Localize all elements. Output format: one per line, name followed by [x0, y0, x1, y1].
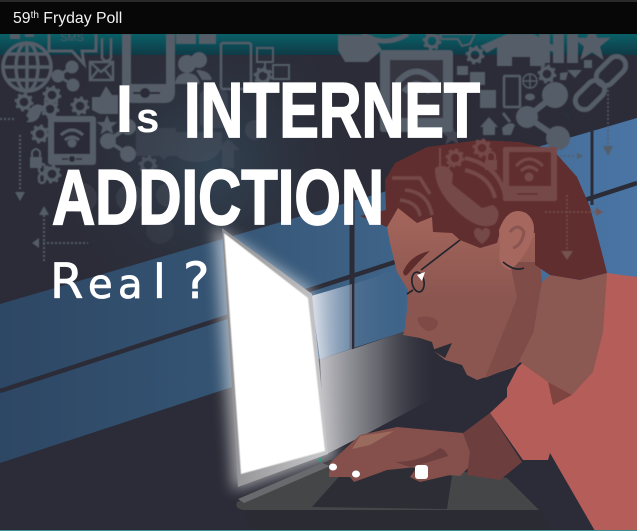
icon: envelope [90, 62, 113, 80]
icon: phone [504, 76, 520, 107]
icon: large faded gear [67, 183, 180, 244]
icon: call waves [465, 158, 505, 198]
ear [499, 211, 534, 270]
face [387, 200, 542, 380]
arrow heads on head [561, 208, 603, 260]
icon: lock right [457, 66, 468, 75]
neck inner shadow [548, 382, 572, 405]
header bar [0, 0, 637, 34]
handwritten word: Real ?: l [153, 255, 166, 309]
glasses [407, 240, 524, 294]
header text: th [31, 10, 39, 21]
laptop screen [222, 228, 328, 487]
icon: thumbs up [92, 86, 118, 114]
word: ADDICTION: ADDICTION [52, 153, 384, 241]
icon: globe [3, 43, 51, 91]
handwritten word: Is: s [136, 94, 159, 141]
hand [329, 427, 470, 482]
icon: wifi tablet left [48, 116, 96, 165]
icon: share mid [102, 121, 134, 160]
handwritten word: Real ?: ? [183, 252, 210, 310]
title [50, 66, 480, 310]
icon: at sign ring [362, 34, 408, 41]
window with mullions [0, 118, 637, 463]
icon: thumbs up right [338, 35, 382, 62]
icon: SMS bubble: SMS [60, 32, 84, 44]
header text: Fryday Poll [39, 10, 122, 27]
fingernails [329, 464, 428, 479]
handwritten word: Real ?: R [50, 254, 83, 310]
icon: faded arcs left of head [392, 178, 432, 216]
arrows: dotted [0, 119, 88, 262]
icon: house [480, 34, 558, 66]
neck [517, 273, 607, 395]
arrow heads [15, 192, 49, 248]
laptop glow [214, 225, 443, 490]
icon: globe small [523, 74, 537, 88]
icon: big share right [519, 85, 567, 147]
icon: binders [539, 34, 578, 63]
dotted cross arrow on head [545, 195, 595, 250]
eyebrow [403, 251, 430, 276]
icon: paper clip [102, 38, 111, 61]
icon: phone handset [435, 166, 499, 226]
icon: bubble and round shape [136, 90, 265, 168]
handwritten word: Is: I [115, 71, 134, 147]
icon: small tiles right [525, 60, 592, 100]
word: INTERNET: INTERNET [184, 66, 480, 154]
icon: small tablet [221, 43, 251, 89]
keyboard [312, 465, 452, 509]
handwritten word: Real ?: e [88, 262, 113, 308]
icon: big chain [572, 53, 629, 113]
icon: SMS bubble [49, 32, 96, 64]
icon: people [175, 52, 212, 84]
background internet icons [0, 25, 629, 262]
shirt [490, 273, 637, 531]
lips [417, 317, 438, 331]
icon: folder [470, 72, 496, 108]
icon: clip on head [440, 148, 450, 170]
hair [360, 140, 607, 280]
arrow head down [577, 146, 613, 159]
icon: big wifi tablet [380, 50, 453, 132]
icon: small house and bird [442, 113, 515, 144]
icon: wifi tablet on head [503, 147, 557, 201]
icon: lock [30, 149, 42, 168]
icon: share small [53, 62, 78, 90]
man figure [329, 140, 637, 531]
icon: chat bubble right [441, 34, 475, 46]
icon: big smartphone [122, 34, 175, 103]
icon: hierarchy [257, 48, 289, 79]
header text: 59 [13, 10, 31, 27]
dotted right arrow [560, 90, 608, 156]
icon: chain [39, 164, 45, 183]
head icons overlay [392, 140, 603, 260]
arm [463, 413, 522, 480]
icon: lock on head [485, 152, 497, 170]
icon: top squares [10, 34, 216, 44]
laptop base [236, 460, 552, 530]
neck band shade [485, 262, 542, 378]
handwritten word: Real ?: a [118, 262, 143, 308]
icon: bird [26, 104, 47, 122]
